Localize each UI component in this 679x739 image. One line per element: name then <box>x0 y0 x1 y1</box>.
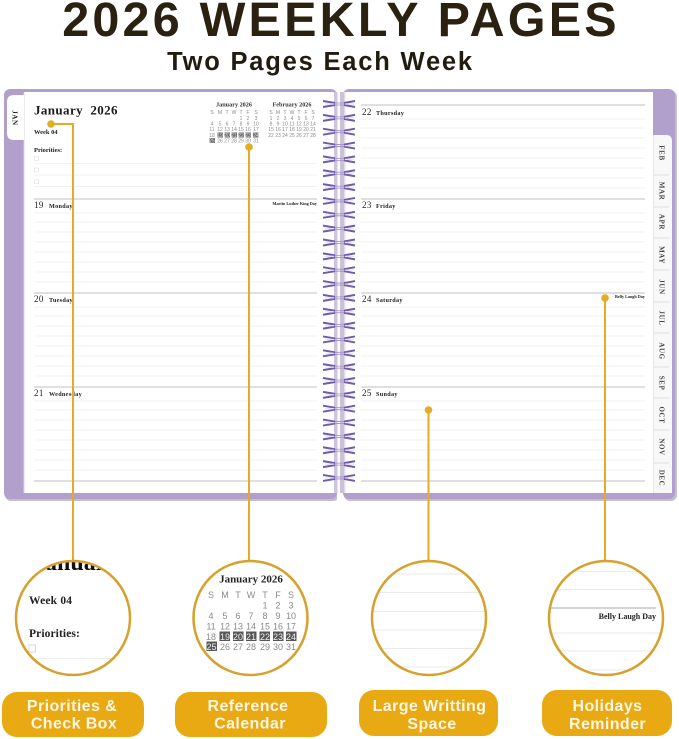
mini calendar: January 2026: 24 <box>253 133 259 139</box>
day divider lines: right page <box>361 105 645 481</box>
mini calendar: February 2026: 6 <box>305 116 308 122</box>
magnifier: reference calendar: S <box>208 590 214 600</box>
magnifier: reference calendar: 19 <box>220 632 230 642</box>
magnifier: reference calendar: 31 <box>286 642 296 652</box>
month tabs: NOV <box>658 438 666 456</box>
mini calendar: January 2026: T <box>225 110 229 116</box>
day: 25 Sunday <box>362 388 398 398</box>
label: Large Writting Space <box>359 690 498 736</box>
mini calendar: January 2026: W <box>232 110 237 116</box>
magnifier: priorities and check box <box>16 550 130 675</box>
magnifier: reference calendar: 15 <box>260 622 270 632</box>
magnifier: reference calendar: 20 <box>233 632 243 642</box>
mini calendar: February 2026: S <box>311 110 315 116</box>
magnifier: reference calendar: M <box>221 590 229 600</box>
mini calendar: February 2026: 12 <box>296 122 302 128</box>
magnifier: reference calendar: January 2026 <box>219 574 283 586</box>
mini calendar: January 2026: 30 <box>245 138 251 144</box>
mini calendar: January 2026: 11 <box>209 127 215 133</box>
day: 25 Sunday: 25 <box>362 388 372 398</box>
mini calendar: January 2026: 19 <box>217 133 223 139</box>
mini calendar: January 2026: 6 <box>226 122 229 128</box>
mini calendar: February 2026: 13 <box>303 122 309 128</box>
mini calendar: February 2026: 16 <box>275 127 281 133</box>
month tabs: FEB <box>658 145 666 161</box>
mini calendar: February 2026: 18 <box>289 127 295 133</box>
mini calendar: January 2026: 13 <box>224 127 230 133</box>
magnifier: reference calendar: 2 <box>275 600 281 610</box>
month tabs: SEP <box>658 376 666 390</box>
magnifier: reference calendar: 9 <box>275 611 281 621</box>
magnifier: reference calendar: 7 <box>248 611 254 621</box>
magnifier: reference calendar: T <box>235 590 241 600</box>
mini calendar: February 2026: 7 <box>312 116 315 122</box>
mini calendar: January 2026: 31 <box>253 138 259 144</box>
magnifier: holidays reminder: Belly Laugh Day <box>599 612 656 621</box>
priorities section: Priorities: <box>34 147 62 154</box>
writing lines: left page <box>34 213 317 470</box>
month heading: January 2026 <box>34 102 118 118</box>
magnifier: priorities and check box: Priorities: <box>29 628 80 640</box>
month tabs: JUL <box>658 310 666 326</box>
magnifier: priorities and check box: Week 04 <box>29 595 72 607</box>
mini calendar: February 2026: 19 <box>296 127 302 133</box>
magnifier: reference calendar: 26 <box>220 642 230 652</box>
day: 24 Saturday <box>362 294 403 304</box>
magnifier: reference calendar: F <box>275 590 281 600</box>
subtitle: Two Pages Each Week <box>167 48 474 76</box>
mini calendar: February 2026: 15 <box>268 127 274 133</box>
mini calendar: February 2026: 4 <box>291 116 294 122</box>
label: Large Writting Space: Space <box>407 716 457 733</box>
mini calendar: February 2026: T <box>297 110 301 116</box>
mini calendar: January 2026: 25 <box>209 138 215 144</box>
mini calendar: January 2026: January 2026 <box>216 102 252 108</box>
day: 19 Monday: 19 <box>34 200 44 210</box>
day: 22 Thursday <box>362 107 405 117</box>
mini calendar: January 2026: 5 <box>219 122 222 128</box>
magnifier: reference calendar: 6 <box>235 611 241 621</box>
tab: JAN <box>7 95 24 140</box>
mini calendar: February 2026: M <box>276 110 280 116</box>
magnifier: reference calendar: 13 <box>233 622 243 632</box>
magnifier: reference calendar: 14 <box>246 622 256 632</box>
month tabs <box>654 135 672 493</box>
mini calendar: January 2026: 18 <box>209 133 215 139</box>
month tabs: APR <box>658 214 666 230</box>
month tabs: MAY <box>658 246 666 264</box>
arrow: writing space connector <box>425 406 432 562</box>
magnifier: reference calendar: T <box>262 590 268 600</box>
mini calendar: January 2026: M <box>218 110 222 116</box>
magnifier: reference calendar: 11 <box>206 622 216 632</box>
day: 24 Saturday: 24 <box>362 294 372 304</box>
magnifier: reference calendar: 3 <box>288 600 294 610</box>
day: 19 Monday: Monday <box>49 203 73 210</box>
mini calendar: February 2026 <box>268 102 316 139</box>
magnifier: reference calendar: 16 <box>273 622 283 632</box>
spiral binding <box>323 89 355 501</box>
mini calendar: January 2026: 21 <box>231 133 237 139</box>
magnifier: reference calendar: 5 <box>222 611 228 621</box>
label: Priorities & Check Box: Check Box <box>31 716 117 732</box>
mini calendar: February 2026: 11 <box>289 122 295 128</box>
mini calendar: February 2026: 17 <box>282 127 288 133</box>
mini calendar: January 2026: 22 <box>238 133 244 139</box>
mini calendar: January 2026: F <box>246 110 250 116</box>
day: 24 Saturday: Saturday <box>376 297 403 304</box>
mini calendar: January 2026: 29 <box>238 138 244 144</box>
panel: right planner page <box>343 89 677 501</box>
mini calendar: January 2026: 3 <box>255 116 258 122</box>
mini calendar: February 2026: 8 <box>270 122 273 128</box>
day: 21 Wednesday: Wednesday <box>49 391 83 398</box>
mini calendar: January 2026: 28 <box>231 138 237 144</box>
mini calendar: January 2026 <box>209 102 259 144</box>
label: Priorities & Check Box: Priorities & <box>27 698 117 715</box>
day: 20 Tuesday: 20 <box>34 294 44 304</box>
mini calendar: February 2026: 1 <box>270 116 273 122</box>
day: 20 Tuesday: Tuesday <box>49 297 73 304</box>
label: Priorities & Check Box <box>2 692 144 737</box>
mini calendar: February 2026: 9 <box>277 122 280 128</box>
day: 25 Sunday: Sunday <box>376 391 398 398</box>
magnifier: reference calendar: 10 <box>286 611 296 621</box>
panel: left planner page <box>4 89 339 501</box>
mini calendar: February 2026: F <box>304 110 308 116</box>
magnifier: reference calendar: 27 <box>233 642 243 652</box>
day: 22 Thursday: 22 <box>362 107 372 117</box>
mini calendar: February 2026: 22 <box>268 133 274 139</box>
magnifier: reference calendar: 12 <box>220 622 230 632</box>
mini calendar: January 2026: 27 <box>224 138 230 144</box>
mini calendar: January 2026: 26 <box>217 138 223 144</box>
day divider lines: left page <box>34 199 317 481</box>
day: 19 Monday <box>34 200 73 210</box>
day: 22 Thursday: Thursday <box>376 110 405 117</box>
magnifier: reference calendar: 22 <box>260 632 270 642</box>
mini calendar: February 2026: 14 <box>310 122 316 128</box>
mini calendar: January 2026: 10 <box>253 122 259 128</box>
magnifier: reference calendar <box>194 561 308 675</box>
mini calendar: February 2026: 10 <box>282 122 288 128</box>
magnifier: reference calendar: 25 <box>206 642 217 652</box>
day: 20 Tuesday <box>34 294 73 304</box>
magnifier: reference calendar: 21 <box>246 632 256 642</box>
arrow: holiday connector <box>601 294 609 562</box>
magnifier: reference calendar: 30 <box>273 642 283 652</box>
day: 23 Friday: Friday <box>376 203 396 210</box>
mini calendar: February 2026: 3 <box>284 116 287 122</box>
mini calendar: January 2026: 4 <box>211 122 214 128</box>
mini calendar: January 2026: S <box>254 110 258 116</box>
magnifier: reference calendar: 1 <box>262 600 268 610</box>
magnifier: reference calendar: 29 <box>260 642 270 652</box>
mini calendar: February 2026: February 2026 <box>272 102 312 108</box>
mini calendar: January 2026: 20 <box>224 133 230 139</box>
week label: Week 04 <box>34 129 58 136</box>
magnifier: priorities and check box: anuar <box>45 550 107 576</box>
mini calendar: January 2026: 1 <box>240 116 243 122</box>
magnifier: reference calendar: W <box>247 590 256 600</box>
mini calendar: January 2026: T <box>239 110 243 116</box>
day: 23 Friday <box>362 200 396 210</box>
mini calendar: January 2026: 23 <box>245 133 251 139</box>
mini calendar: February 2026: 21 <box>310 127 316 133</box>
month tabs: DEC <box>658 470 666 486</box>
day: 21 Wednesday <box>34 388 83 398</box>
magnifier: reference calendar: 8 <box>262 611 268 621</box>
day: 21 Wednesday: 21 <box>34 388 44 398</box>
mini calendar: February 2026: 26 <box>296 133 302 139</box>
mini calendar: January 2026: 12 <box>217 127 223 133</box>
label: Holidays Reminder: Reminder <box>569 716 646 733</box>
mini calendar: February 2026: S <box>269 110 273 116</box>
mini calendar: January 2026: 17 <box>253 127 259 133</box>
mini calendar: February 2026: 23 <box>275 133 281 139</box>
arrow: priorities connector <box>47 120 73 562</box>
label: Reference Calendar: Calendar <box>214 716 286 732</box>
mini calendar: January 2026: 8 <box>240 122 243 128</box>
label: Large Writting Space: Large Writting <box>373 698 486 715</box>
arrow: calendar connector <box>245 143 253 562</box>
day: 23 Friday: 23 <box>362 200 372 210</box>
mini calendar: January 2026: 14 <box>231 127 237 133</box>
month tabs: MAR <box>658 182 666 201</box>
tab: JAN: JAN <box>10 110 18 126</box>
mini calendar: February 2026: 25 <box>289 133 295 139</box>
mini calendar: February 2026: 5 <box>298 116 301 122</box>
writing lines: right page <box>361 119 645 470</box>
label: Holidays Reminder <box>542 690 672 736</box>
priorities section <box>34 147 317 186</box>
magnifier: holidays reminder <box>549 561 663 675</box>
mini calendar: January 2026: 2 <box>247 116 250 122</box>
mini calendar: February 2026: 24 <box>282 133 288 139</box>
magnifier: reference calendar: 4 <box>208 611 214 621</box>
magnifier: large writing space <box>372 561 486 675</box>
magnifier: reference calendar: S <box>288 590 294 600</box>
magnifier: reference calendar: 24 <box>286 632 296 642</box>
magnifier: reference calendar: 23 <box>273 632 283 642</box>
mini calendar: January 2026: 9 <box>247 122 250 128</box>
mini calendar: February 2026: 20 <box>303 127 309 133</box>
mini calendar: February 2026: 2 <box>277 116 280 122</box>
month tabs: OCT <box>658 407 666 423</box>
holiday: Martin Luther King Day: Martin Luther King Day <box>273 201 318 206</box>
label: Reference Calendar: Reference <box>208 698 288 715</box>
mini calendar: January 2026: 7 <box>233 122 236 128</box>
month tabs: JUN <box>658 279 666 295</box>
label: Holidays Reminder: Holidays <box>573 698 642 715</box>
mini calendar: February 2026: T <box>283 110 287 116</box>
month tabs: AUG <box>658 342 666 360</box>
mini calendar: January 2026: 16 <box>245 127 251 133</box>
mini calendar: January 2026: S <box>210 110 214 116</box>
mini calendar: February 2026: 28 <box>310 133 316 139</box>
magnifier: reference calendar: 28 <box>246 642 256 652</box>
label: Reference Calendar <box>175 692 327 737</box>
mini calendar: February 2026: 27 <box>303 133 309 139</box>
magnifier: reference calendar: 17 <box>286 622 296 632</box>
mini calendar: February 2026: W <box>290 110 295 116</box>
magnifier: reference calendar: 18 <box>206 632 216 642</box>
mini calendar: January 2026: 15 <box>238 127 244 133</box>
holiday: Belly Laugh Day: Belly Laugh Day <box>615 294 646 299</box>
